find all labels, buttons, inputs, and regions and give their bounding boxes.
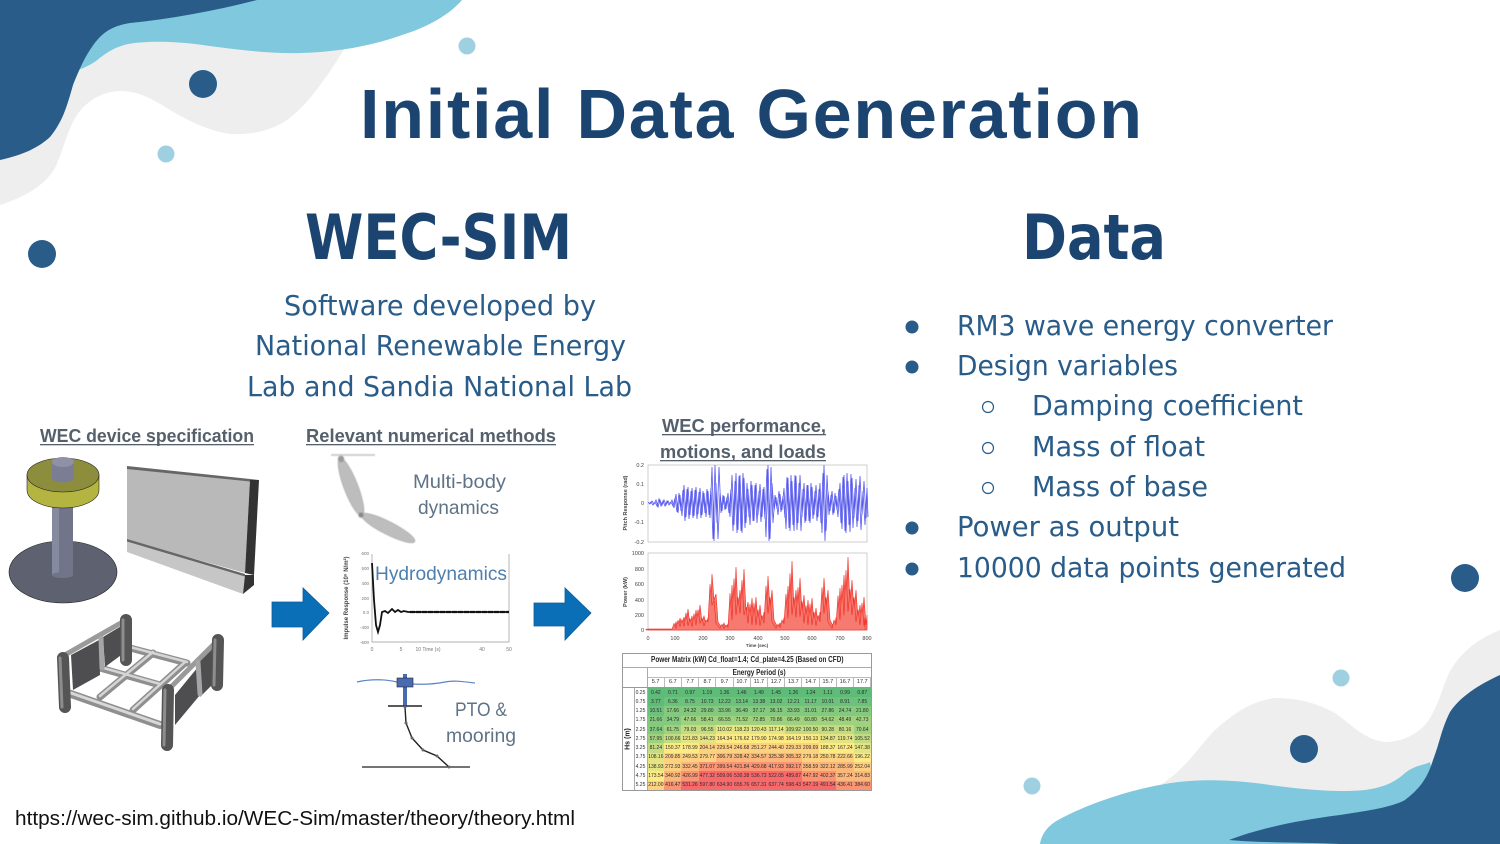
- table: power matrix: 33.93: [787, 708, 800, 714]
- chart: pitch response time series: 0: [641, 501, 644, 507]
- table: power matrix: 244.40: [768, 745, 784, 751]
- chart: hydrodynamics impulse response: -400: [360, 625, 369, 630]
- table: power matrix: 119.74: [838, 736, 852, 742]
- table: power matrix: 322.12: [820, 764, 835, 770]
- table: power matrix: 447.92: [803, 773, 818, 779]
- table: power matrix: 657.31: [751, 782, 767, 788]
- heading: WEC device specification: WEC device specification: [40, 426, 254, 446]
- label: PTO and mooring: [446, 699, 516, 747]
- chart: power time series: 100: [670, 636, 680, 642]
- table: power matrix: Hs (m): [625, 728, 632, 750]
- table: power matrix: 332.45: [682, 764, 698, 770]
- table: power matrix: 547.19: [803, 782, 818, 788]
- table: power matrix: 70.64: [856, 727, 868, 733]
- icon: point absorber device: [9, 457, 117, 603]
- table: power matrix: 96.55: [701, 727, 714, 733]
- table: power matrix: 328.42: [734, 754, 749, 760]
- table: power matrix: 173.54: [648, 773, 664, 779]
- table: power matrix: 637.74: [768, 782, 784, 788]
- table: power matrix: 6.36: [668, 699, 678, 705]
- table: power matrix: 2.75: [636, 736, 645, 742]
- table: power matrix: 340.92: [665, 773, 680, 779]
- icon: frame device: [60, 620, 218, 745]
- chart: power time series: 400: [753, 636, 763, 642]
- table: power matrix: 16.7: [840, 679, 850, 685]
- table: power matrix: 334.57: [751, 754, 767, 760]
- table: power matrix: 402.37: [820, 773, 835, 779]
- table: power matrix: 252.04: [855, 764, 870, 770]
- table: power matrix: 0.97: [685, 690, 695, 696]
- table: power matrix: 12.22: [718, 699, 731, 705]
- table: power matrix: 426.99: [682, 773, 698, 779]
- icon: multi-body linkage: [331, 455, 418, 547]
- table: power matrix: 0.71: [668, 690, 678, 696]
- table: power matrix: 118.23: [734, 727, 749, 733]
- table: power matrix: 60.80: [804, 717, 817, 723]
- table: power matrix: 100.66: [665, 736, 680, 742]
- table: power matrix: 121.83: [682, 736, 698, 742]
- table: power matrix: 11.17: [804, 699, 817, 705]
- table: power matrix: 272.93: [665, 764, 680, 770]
- table: power matrix: 17.66: [667, 708, 679, 714]
- table: power matrix: 522.05: [768, 773, 784, 779]
- table: power matrix: 1.11: [823, 690, 832, 696]
- chart: pitch response time series: 0.2: [636, 463, 644, 469]
- chart: hydrodynamics impulse response: 0: [371, 647, 374, 653]
- table: power matrix: 47.66: [684, 717, 696, 723]
- table: power matrix: 4.75: [636, 773, 645, 779]
- table: power matrix: 61.75: [667, 727, 679, 733]
- chart: power time series: 700: [835, 636, 845, 642]
- text block: WEC-SIM description: [247, 290, 632, 403]
- table: power matrix: 417.93: [768, 764, 784, 770]
- table: power matrix: 314.83: [855, 773, 870, 779]
- label: Multi-body dynamics: [413, 471, 506, 519]
- table: power matrix: 530.38: [734, 773, 749, 779]
- table: power matrix: 429.68: [751, 764, 767, 770]
- chart: hydrodynamics impulse response: 600: [361, 551, 369, 556]
- chart: pitch response time series: -0.1: [635, 520, 644, 526]
- table: power matrix: 176.62: [734, 736, 749, 742]
- table: power matrix: 138.93: [648, 764, 664, 770]
- table: power matrix: 100.50: [803, 727, 818, 733]
- icon: oscillating flap device: [127, 466, 259, 594]
- table: power matrix: 144.23: [700, 736, 715, 742]
- table: power matrix: 58.41: [701, 717, 714, 723]
- table: power matrix: 14.7: [805, 679, 816, 685]
- text block: WEC-SIM description: Lab and Sandia National Lab: [247, 371, 632, 403]
- table: power matrix: 4.25: [636, 764, 645, 770]
- chart: power time series: 500: [780, 636, 790, 642]
- table: power matrix: 164.19: [786, 736, 801, 742]
- table: power matrix: 2.25: [636, 727, 645, 733]
- table: power matrix: 24.74: [839, 708, 851, 714]
- chart: power time series: Time (sec): [746, 643, 769, 648]
- table: power matrix: 36.15: [770, 708, 782, 714]
- table: power matrix: 305.32: [786, 754, 801, 760]
- chart: pitch response time series: [623, 463, 868, 546]
- chart: power time series: 600: [635, 582, 644, 588]
- text block: WEC-SIM description: Software developed by: [284, 290, 596, 322]
- heading: WEC-SIM: WEC-SIM: [305, 201, 572, 274]
- table: power matrix: 7.7: [686, 679, 694, 685]
- table: power matrix: 306.79: [717, 754, 732, 760]
- table: power matrix: 11.7: [754, 679, 764, 685]
- chart: power time series: 1000: [632, 551, 644, 557]
- chart: hydrodynamics impulse response: 40: [479, 647, 485, 653]
- heading: WEC performance, motions, and loads: [660, 416, 826, 462]
- label: PTO and mooring: mooring: [446, 725, 516, 747]
- table: power matrix: 279.18: [803, 754, 818, 760]
- label: Multi-body dynamics: dynamics: [418, 497, 499, 519]
- table: power matrix: 10.01: [822, 699, 834, 705]
- table: power matrix: 436.41: [837, 782, 853, 788]
- decoration: light dot right: [1332, 670, 1350, 686]
- table: power matrix: 21.66: [650, 717, 662, 723]
- chart: hydrodynamics impulse response: [343, 551, 512, 653]
- decoration: dark dot left: [28, 240, 56, 268]
- table: power matrix: 34.79: [667, 717, 679, 723]
- table: power matrix: 164.34: [717, 736, 732, 742]
- table: power matrix: 105.52: [855, 736, 870, 742]
- table: power matrix: 222.66: [837, 754, 853, 760]
- table: power matrix: 0.75: [636, 699, 645, 705]
- table: power matrix: 325.38: [768, 754, 784, 760]
- chart: power time series: 200: [698, 636, 708, 642]
- table: power matrix: 1.25: [636, 708, 645, 714]
- table: power matrix: 36.49: [735, 708, 748, 714]
- table: power matrix: 117.14: [769, 727, 784, 733]
- table: power matrix: 531.26: [682, 782, 698, 788]
- table: power matrix: 491.54: [820, 782, 835, 788]
- table: power matrix: 204.14: [700, 745, 715, 751]
- bullet list: data details: Mass of base: [1032, 471, 1208, 503]
- table: power matrix: 209.85: [665, 754, 680, 760]
- bullet list: data details: [906, 310, 1346, 584]
- table: power matrix: 0.42: [651, 690, 661, 696]
- table: power matrix: 70.86: [770, 717, 782, 723]
- table: power matrix: 109.92: [786, 727, 801, 733]
- table: power matrix: 1.36: [720, 690, 729, 696]
- table: power matrix: 655.76: [734, 782, 749, 788]
- table: power matrix: 79.03: [684, 727, 696, 733]
- table: power matrix: 167.24: [837, 745, 853, 751]
- table: power matrix: 178.99: [682, 745, 698, 751]
- decoration: light dot top: [458, 38, 476, 54]
- chart: hydrodynamics impulse response: 5: [400, 647, 403, 653]
- arrow: methods to results: [534, 588, 591, 640]
- table: power matrix: 57.95: [650, 736, 662, 742]
- table: power matrix: 90.28: [822, 727, 834, 733]
- table: power matrix: 37.17: [753, 708, 765, 714]
- chart: power time series: 200: [635, 613, 644, 619]
- table: power matrix: 1.45: [771, 690, 781, 696]
- table: power matrix: 188.37: [820, 745, 835, 751]
- title: Initial Data Generation: [360, 75, 1142, 153]
- decoration: bottom-right wave shapes: [1040, 630, 1500, 844]
- table: power matrix: 509.06: [717, 773, 732, 779]
- table: power matrix: 209.69: [803, 745, 818, 751]
- bullet list: data details: 10000 data points generated: [957, 552, 1346, 584]
- table: power matrix: 134.87: [820, 736, 835, 742]
- table: power matrix: 13.38: [753, 699, 765, 705]
- chart: pitch response time series: 0.1: [636, 482, 644, 488]
- label: PTO and mooring: PTO &: [455, 699, 507, 721]
- icon: PTO and mooring diagram: [357, 674, 475, 768]
- table: power matrix: 285.99: [837, 764, 853, 770]
- table: power matrix: 229.54: [717, 745, 732, 751]
- table: power matrix: 246.68: [734, 745, 749, 751]
- table: power matrix: Energy Period (s): [733, 668, 786, 676]
- heading: WEC performance, motions, and loads: motions, and loads: [660, 442, 826, 462]
- table: power matrix: 24.32: [684, 708, 696, 714]
- table: power matrix: 150.37: [665, 745, 680, 751]
- table: power matrix: 48.49: [839, 717, 851, 723]
- chart: pitch response time series: -0.2: [635, 540, 644, 546]
- label: Multi-body dynamics: Multi-body: [413, 471, 506, 493]
- label: Hydrodynamics: Hydrodynamics: [375, 563, 507, 585]
- table: power matrix: 229.33: [786, 745, 801, 751]
- table: power matrix: 10.7: [736, 679, 747, 685]
- chart: hydrodynamics impulse response: 500: [361, 566, 369, 571]
- table: power matrix: 251.27: [751, 745, 767, 751]
- table: power matrix: 80.16: [839, 727, 851, 733]
- table: power matrix: 54.62: [822, 717, 834, 723]
- chart: hydrodynamics impulse response: 10 Time (s): [415, 647, 441, 653]
- table: power matrix: 72.85: [753, 717, 765, 723]
- table: power matrix: 9.7: [721, 679, 728, 685]
- decoration: light dot bottom: [1024, 778, 1040, 794]
- chart: power time series: 800: [862, 636, 872, 642]
- chart: power time series: 0: [646, 636, 650, 642]
- table: power matrix: 37.64: [650, 727, 662, 733]
- table: power matrix: 1.49: [754, 690, 764, 696]
- table: power matrix: 634.90: [717, 782, 732, 788]
- table: power matrix: 1.19: [702, 690, 712, 696]
- table: power matrix: 1.46: [737, 690, 747, 696]
- table: power matrix: 392.17: [786, 764, 801, 770]
- table: power matrix: 250.78: [820, 754, 835, 760]
- table: power matrix: 477.32: [700, 773, 715, 779]
- table: power matrix: 17.7: [857, 679, 868, 685]
- source URL: https://wec-sim.github.io/WEC-Sim/master/theory/theory.html: [15, 808, 575, 830]
- table: power matrix: 416.47: [665, 782, 680, 788]
- table: power matrix: 597.80: [700, 782, 715, 788]
- table: power matrix: 5.7: [652, 679, 659, 685]
- table: power matrix: 33.96: [718, 708, 731, 714]
- table: power matrix: 1.24: [806, 690, 815, 696]
- table: power matrix: [623, 654, 871, 790]
- table: power matrix: 31.01: [804, 708, 817, 714]
- decoration: dark dot top: [189, 70, 217, 98]
- table: power matrix: Power Matrix (kW) Cd_float=1.4; Cd_plate=4.25 (Based on CFD): [651, 655, 843, 664]
- table: power matrix: 150.13: [803, 736, 818, 742]
- chart: power time series: 400: [635, 598, 644, 604]
- table: power matrix: 371.07: [700, 764, 715, 770]
- table: power matrix: 13.14: [735, 699, 748, 705]
- table: power matrix: 5.25: [636, 782, 645, 788]
- table: power matrix: 1.75: [636, 717, 645, 723]
- table: power matrix: 536.73: [751, 773, 767, 779]
- table: power matrix: 598.43: [786, 782, 801, 788]
- table: power matrix: 8.91: [840, 699, 850, 705]
- table: power matrix: 108.16: [648, 754, 664, 760]
- bullet list: data details: Mass of float: [1032, 431, 1205, 463]
- table: power matrix: 179.90: [751, 736, 767, 742]
- chart: power time series: 800: [635, 567, 644, 573]
- bullet list: data details: Damping coefficient: [1032, 390, 1303, 422]
- table: power matrix: 147.38: [855, 745, 870, 751]
- chart: power time series: 300: [725, 636, 735, 642]
- table: power matrix: 29.80: [701, 708, 714, 714]
- table: power matrix: 3.75: [636, 754, 645, 760]
- bullet list: data details: Power as output: [957, 511, 1179, 543]
- chart: hydrodynamics impulse response: Impulse Response (10⁶ N/m²): [343, 556, 350, 640]
- table: power matrix: 489.87: [786, 773, 801, 779]
- table: power matrix: 42.73: [856, 717, 868, 723]
- decoration: light dot left: [158, 146, 174, 162]
- table: power matrix: 0.87: [857, 690, 867, 696]
- table: power matrix: 421.84: [734, 764, 749, 770]
- decoration: dark dot bottom: [1290, 735, 1318, 763]
- table: power matrix: 6.7: [669, 679, 677, 685]
- chart: power time series: Power (kW): [623, 577, 629, 607]
- table: power matrix: 12.21: [787, 699, 800, 705]
- table: power matrix: 3.77: [651, 699, 661, 705]
- table: power matrix: 212.00: [648, 782, 664, 788]
- table: power matrix: 15.7: [822, 679, 833, 685]
- text block: WEC-SIM description: National Renewable Energy: [255, 330, 626, 362]
- heading: WEC performance, motions, and loads: WEC performance,: [662, 416, 826, 436]
- chart: hydrodynamics impulse response: 200: [361, 596, 369, 601]
- table: power matrix: 10.51: [650, 708, 662, 714]
- table: power matrix: 120.43: [751, 727, 767, 733]
- table: power matrix: 8.75: [685, 699, 695, 705]
- table: power matrix: 279.77: [700, 754, 715, 760]
- bullet list: data details: Design variables: [957, 350, 1178, 382]
- table: power matrix: 0.99: [840, 690, 850, 696]
- chart: pitch response time series: Pitch Response (rad): [623, 475, 629, 531]
- table: power matrix: 399.54: [717, 764, 732, 770]
- table: power matrix: 7.85: [857, 699, 867, 705]
- table: power matrix: 357.24: [837, 773, 853, 779]
- chart: power time series: [623, 551, 872, 648]
- table: power matrix: 12.7: [771, 679, 782, 685]
- table: power matrix: 174.98: [768, 736, 784, 742]
- table: power matrix: 8.7: [703, 679, 711, 685]
- table: power matrix: 249.53: [682, 754, 698, 760]
- table: power matrix: 81.24: [650, 745, 662, 751]
- chart: hydrodynamics impulse response: 400: [361, 581, 369, 586]
- table: power matrix: 3.25: [636, 745, 645, 751]
- table: power matrix: 0.25: [636, 690, 645, 696]
- table: power matrix: 21.80: [856, 708, 868, 714]
- arrow: device to methods: [272, 588, 329, 640]
- table: power matrix: 66.55: [718, 717, 731, 723]
- table: power matrix: 13.7: [788, 679, 799, 685]
- table: power matrix: 27.86: [822, 708, 834, 714]
- table: power matrix: 384.60: [855, 782, 870, 788]
- bullet list: data details: RM3 wave energy converter: [957, 310, 1334, 342]
- table: power matrix: 1.36: [788, 690, 798, 696]
- table: power matrix: 358.59: [803, 764, 818, 770]
- table: power matrix: 196.22: [855, 754, 870, 760]
- heading: Data: Data: [1022, 201, 1166, 274]
- chart: hydrodynamics impulse response: 50: [506, 647, 512, 653]
- table: power matrix: 13.02: [770, 699, 782, 705]
- decoration: dark dot right: [1451, 564, 1479, 592]
- table: power matrix: 66.49: [787, 717, 800, 723]
- table: power matrix: 10.73: [701, 699, 714, 705]
- decoration: top-left wave shapes: [0, 0, 462, 205]
- table: power matrix: 110.02: [717, 727, 732, 733]
- heading: Relevant numerical methods: Relevant numerical methods: [306, 426, 556, 446]
- chart: power time series: 600: [807, 636, 817, 642]
- chart: hydrodynamics impulse response: -600: [360, 640, 369, 645]
- chart: power time series: 0: [641, 628, 644, 634]
- table: power matrix: 71.52: [735, 717, 748, 723]
- chart: hydrodynamics impulse response: 0.0: [363, 610, 369, 615]
